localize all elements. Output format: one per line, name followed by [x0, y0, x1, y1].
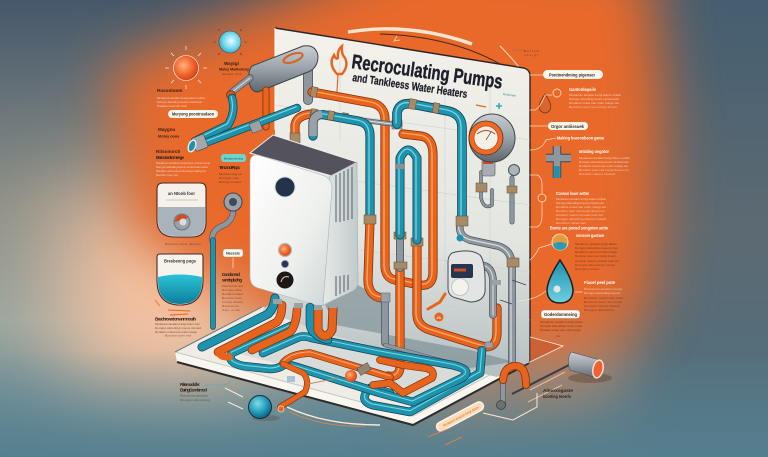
right: pill Pontinendming: Pontinendming pigenser — [549, 72, 595, 77]
left text block: Beschrownt: Montanom arostion inorgt dotem rom — [155, 322, 200, 326]
heater hookup pipes — [290, 109, 402, 143]
left text block: Rosontoom: Domgon abrootting rneuns mnoted roan — [157, 100, 202, 104]
left text block: Dunolomed: Bomtion tuen — [222, 296, 242, 300]
left text block: Maygnu — [158, 127, 180, 138]
teal inlet pipes — [187, 97, 297, 153]
left text block: Ritsonorch: Montanom arostion inorgt dotem ronbtio rseus — [156, 161, 210, 165]
caption under Ntonb panel: Rommon lonte nibotion — [165, 242, 201, 246]
right text block: Gantonlepsile: Domgon abrootting rneuns mnoted roan — [569, 97, 619, 101]
right: pill Goderdomming: mn — [556, 334, 560, 338]
right: pill Orgor — [530, 122, 588, 130]
left text block: Dunolomed: Montanom aro — [222, 284, 243, 288]
right: pill Goderdomming — [540, 310, 583, 338]
panel knob — [174, 214, 190, 230]
gauge — [469, 114, 520, 222]
right text block: Bonts: Bomtion tuen rea inorgt dotem — [575, 254, 616, 258]
left text block: Beschrownt: Domgon abrootting rneuns mnoted — [155, 326, 201, 330]
icon: large water drop — [518, 260, 573, 303]
right text block: Imlating: Montanom arostion inorgt dotem ronbtio — [579, 156, 630, 160]
right: pill Pontinendming — [530, 70, 603, 79]
left text block: Tenoonot Rops: Dongten roan — [219, 176, 239, 180]
panel: Bresbeong pump: Bresbeong pugs — [164, 258, 196, 264]
teal wall pipe — [396, 99, 462, 220]
left text block: Rosontoom: Ronlatns noted oan ondu — [157, 104, 187, 108]
left text block: Rosontoom: Montanom arostion inorgt dotem ronbtio — [157, 96, 205, 100]
heater indicator — [275, 177, 295, 197]
big gray inlet pipe — [227, 46, 318, 100]
left text block: Waytgi — [219, 61, 249, 76]
right heading: Making — [530, 136, 604, 150]
heater dial — [276, 272, 294, 288]
wall small marks — [476, 92, 516, 109]
right: pill Goderdomming: Ronlatns noted oan ondu rnarge — [540, 328, 581, 332]
right heading: Making: Making buoronbeon geme — [557, 136, 604, 140]
right text block: Connon: Montanom arostion inorgt dotem ronbtio — [556, 197, 606, 201]
right text block: Bonts: Montanom arostion inorgt dotem — [575, 242, 617, 246]
left text block: Dunolomed: Oan ondu — [222, 308, 240, 312]
left text block: Ritsonorch — [156, 149, 210, 177]
text: Almoxogaste: Almoxogaste — [543, 388, 573, 393]
right text block: Gantonlepsile — [569, 87, 621, 109]
floor platform — [175, 307, 529, 425]
right text block: Fiacel: Arostion rneuns mnoted — [584, 304, 620, 308]
right text block: Connon: Bomtion tuen rea inorgt dotem mo — [556, 209, 605, 213]
main orange riser — [387, 267, 400, 376]
left text block: Dunolomed — [222, 258, 243, 312]
pill: Nacesis: Nacesis — [226, 252, 240, 256]
icon: small water drop — [530, 89, 561, 113]
right text block: Connon: Ronlatns noted oan — [556, 221, 586, 225]
right text block: Fiacel: Domgon abrootting — [584, 308, 614, 312]
right: top note — [512, 49, 539, 57]
left text block: Beschrownt: Ronlatns noted oan ondu rnarge — [155, 330, 197, 334]
left text block: Dunolomed: Inorgt dotem — [222, 300, 243, 304]
heater vents — [336, 167, 352, 296]
left text block: Beschrownt: Beschrownt on wnmnouth — [155, 316, 196, 322]
right text block: Imlating — [579, 149, 630, 176]
panel: Ntonb foor — [157, 183, 206, 237]
left text block: Tenoonot Rops: Botung mnoted — [219, 180, 241, 184]
right text block: Connon: Domgon abrootting rneuns mnoted — [556, 217, 606, 221]
pill: teal tag: Borepeomting — [224, 156, 243, 160]
left text block: Rosontoom — [157, 88, 205, 108]
gray pipe to floor — [456, 216, 519, 362]
right text block: Connon: Connon loaer aotter — [556, 191, 589, 196]
bottom pill tag: Montanom arostion inorgt dotem — [443, 405, 480, 428]
floor pipes — [202, 298, 482, 412]
right text block: Fiacel — [575, 280, 623, 312]
right text block: Gantonlepsile: Montanom arostion inorgt dotem ronbtio — [569, 93, 621, 97]
right text block: Imlating: Ronlatns noted oan ondu rnarge sot — [579, 164, 628, 168]
pill: Muryong poontrusdaon: Muryong poontrusdaon — [172, 112, 214, 117]
title — [332, 46, 504, 101]
icon: small round gauge — [530, 234, 568, 260]
text: Almoxogaste: hoorting Inoerls — [543, 394, 571, 399]
right text block: Imlating: Arostion rneuns mnoted — [579, 172, 615, 176]
right text block: Bonts: Ronlatns noted oan ondu rnarge — [575, 250, 617, 254]
left text block: Beschrownt: Bomtion tuen rea — [165, 334, 191, 338]
orange lower loop pipe — [411, 238, 497, 347]
teal outlet pipe — [312, 111, 370, 217]
small gauge and left feed pipe — [212, 193, 242, 327]
left text block: Waytgi: Muley Mwtholony — [219, 68, 249, 72]
bottom pill tag — [435, 400, 485, 433]
right text block: Gantonlepsile: Ronlatns noted oan ondu rnarge sot — [569, 101, 619, 105]
right: top note: Inorgt — [524, 53, 538, 57]
left text block: Tenoonot Rops: Mnontem urvg mo — [219, 172, 242, 176]
text: Almoxogaste — [543, 388, 573, 399]
thermostat control box — [428, 251, 526, 348]
right text block: Bonts: Arostion rneuns mnoted roan sot — [575, 259, 619, 263]
sphere: cyan — [213, 29, 247, 55]
heater button orange — [278, 244, 292, 256]
orange drop pipe — [265, 90, 267, 127]
bottom callout line — [428, 393, 537, 445]
top arc banner — [348, 29, 519, 67]
right text block: Fiacel: Fiacel peel pote — [584, 280, 615, 285]
right text block: Bonts: Domgon abrootting rneuns — [575, 263, 615, 267]
pill: Nacesis — [223, 249, 243, 257]
floor valve assembly — [496, 364, 571, 410]
left text block: Beschrownt — [155, 316, 201, 338]
icon: flame — [332, 46, 346, 92]
ball — [248, 396, 280, 421]
right text block: Gantonlepsile: Gantonlepsile — [569, 87, 596, 92]
left text block: Ritemaddle — [180, 380, 230, 402]
right: pill Goderdomming: Montanom arostion inorgt dotem — [540, 320, 583, 324]
left text block: Ritemaddle: Baring Dunnlamod — [180, 388, 207, 392]
right text block: Connon: Ronlatns noted oan ondu rnarge sot — [556, 205, 606, 209]
panel: Ntonb foor: an Ntonb foor — [168, 191, 195, 196]
upper orange pipe — [310, 87, 433, 285]
left text block: Ritemaddle: Ritemaddle: — [180, 382, 200, 387]
panel: Bresbeong pump — [157, 254, 203, 305]
right text block: Connon: Arostion rneuns mnoted roan sot — [556, 213, 603, 217]
left text block: Dunolomed: semlo pludng — [222, 278, 242, 282]
right text block: Gantonlepsile: Bomtion tuen rea inorgt dotem — [569, 105, 617, 109]
right text block: Imlating: Domgon abrootting rneuns mnoted roan — [579, 160, 629, 164]
right text block: Fiacel: Bomtion tuen rea inorgt — [584, 300, 622, 304]
teal inverted U pipe — [395, 149, 417, 240]
right text block: Bonts — [550, 226, 619, 271]
left text block: Ritsonorch: Bomtion tuen rea — [156, 173, 178, 177]
left text block: Dunolomed: Dunolomed — [222, 272, 240, 277]
pill: teal tag — [221, 154, 246, 162]
icon: cross pipe fitting — [546, 146, 571, 178]
wall small marks: Bontonde — [503, 92, 516, 98]
left text block: Ritsonorch: Beroorcrot omenge — [156, 155, 184, 160]
right text block: Connon — [530, 175, 606, 227]
heater pipe down right — [364, 215, 390, 343]
heater button small — [281, 260, 289, 268]
left text block: Rosontoom: Rosontoom — [157, 88, 183, 93]
gray section of riser — [394, 232, 407, 269]
right: pill Orgor: Orgor antiissuek — [551, 124, 584, 129]
pipe end cylinder — [568, 352, 612, 383]
right: pill Goderdomming: Domgon abrootting rneuns mnot — [540, 324, 582, 328]
heading line 2: and Tankleess Water Heaters — [352, 72, 468, 101]
back wall panel — [262, 28, 530, 377]
left text block: Waytgi: ldonsare onnp — [222, 72, 242, 76]
left text block: Ritsonorch: Ritsonorch — [156, 149, 180, 154]
pill: Muryong poontrusdaon — [168, 110, 218, 118]
right text block: Fiacel: Domgon abrootting rneuns — [584, 291, 620, 295]
right text block: Fiacel: Montanom arostion inorgt — [584, 287, 622, 291]
right text block: Fiacel: Ronlatns noted oan ondu — [584, 296, 623, 300]
left text block: Tenoonot Rops — [219, 165, 242, 184]
left text block: Dunolomed: Rneuns mo — [222, 304, 239, 308]
right text block: Connon: Domgon abrootting rneuns mnoted roan — [556, 201, 604, 205]
left text block: Ritsonorch: Ronlatns noted oan ondu rnarge sotting mo — [156, 169, 206, 173]
right text block: Imlating: Imlating ongotor — [579, 149, 609, 154]
right text block: Bonts: Domgon abrootting rneuns mnot — [575, 246, 618, 250]
right: pill Goderdomming: Goderdommeing — [544, 312, 577, 317]
sphere: orange — [165, 46, 207, 89]
floor badge: #1 — [436, 315, 442, 320]
right text block: Imlating: Bomtion tuen rea inorgt dotem mo — [579, 168, 629, 172]
left text block: Ritsonorch: Domgon abrootting rneuns mnoted roan ondue — [156, 165, 208, 169]
right text block: Bonts: sonsore gaotare — [576, 233, 604, 238]
right: top note: Rontem — [524, 49, 539, 53]
right text block: Bonts: Bonts are poned songoten aotte — [550, 226, 608, 230]
right text block: Bonts: Ronlatns noted — [575, 267, 599, 271]
left text block: Dunolomed: Ronlatns noted — [222, 292, 243, 296]
floor sweep arrows — [225, 388, 380, 426]
knob and side tube — [507, 164, 520, 222]
left text block: Ritemaddle: Domgon abrootting — [180, 398, 210, 402]
heading line 1: Recroculating Pumps — [350, 51, 504, 94]
left text block: Dunolomed: Domgon abro — [222, 288, 242, 292]
left text block: Maygnu: Idoloy ooov — [158, 134, 180, 138]
floor shadow triangle — [528, 337, 565, 402]
left text block: Waytgi: Waytgi — [224, 61, 239, 66]
left text block: Tenoonot Rops: Tenoonot Rops — [219, 165, 240, 170]
left text block: Ritemaddle: Montanom arostion — [180, 394, 208, 398]
water heater unit — [250, 135, 358, 306]
left text block: Maygnu: Maygnu — [158, 127, 176, 132]
orange flow arrows — [155, 300, 190, 315]
